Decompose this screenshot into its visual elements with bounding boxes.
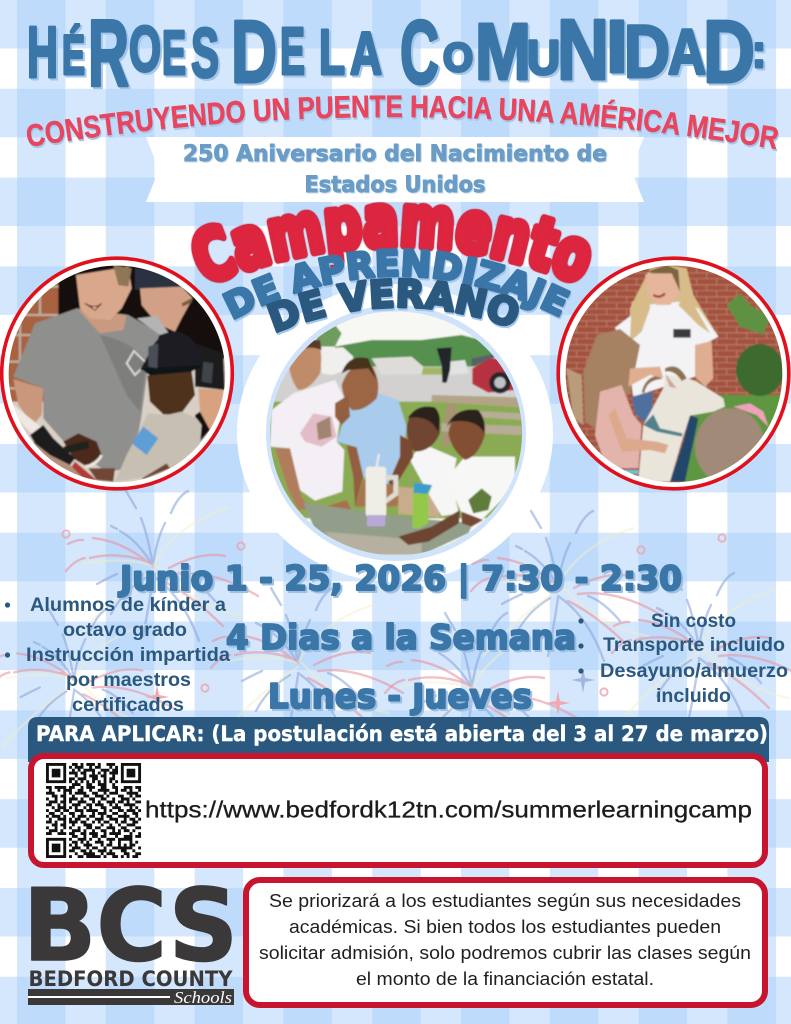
right bullet list: Sin costo <box>651 611 736 632</box>
right bullet list: Desayuno/almuerzo <box>600 661 788 682</box>
right photo: goat visit <box>550 255 791 495</box>
priority note box: el monto de la financiación estatal. <box>356 969 654 989</box>
apply header bar <box>28 717 769 762</box>
title: E <box>162 19 186 88</box>
left bullet list: por maestros <box>66 670 191 691</box>
url box <box>31 756 765 865</box>
title: O <box>129 13 161 85</box>
ribbon banner <box>146 137 644 202</box>
title: C <box>400 3 439 103</box>
poster: CONSTRUYENDO UN PUENTE HACIA UNA AMÉRICA MEJOR <box>26 95 779 152</box>
apply header bar: PARA APLICAR: (La postulación está abierta del 3 al 27 de marzo) <box>36 722 768 746</box>
url text: https://www.bedfordk12tn.com/summerlearningcamp <box>145 796 752 822</box>
right bullet list: incluido <box>656 686 731 707</box>
campamento heading: DE VERANO <box>266 278 520 335</box>
title: M <box>475 7 531 96</box>
subtitle arc <box>28 117 776 149</box>
left photo: firefighters <box>0 255 240 495</box>
title: H <box>27 13 58 93</box>
left bullet list: octavo grado <box>63 620 187 641</box>
title: I <box>606 5 628 88</box>
bcs logo: BCS <box>23 867 238 984</box>
left bullet list: Alumnos de kínder a <box>30 595 226 616</box>
center photo: children <box>270 311 522 556</box>
campamento heading: Campamento <box>190 202 592 284</box>
priority note box: Se priorizará a los estudiantes según sus necesidades <box>269 891 741 911</box>
left bullet list: certificados <box>72 695 184 716</box>
ribbon text line one: 250 Aniversario del Nacimiento de <box>183 142 607 167</box>
title: A <box>668 16 706 88</box>
central photo: white halo <box>237 284 553 582</box>
left bullet list: Instrucción impartida <box>26 645 230 666</box>
title: A <box>350 20 382 87</box>
campamento heading: DE APRENDIZAJE <box>222 248 572 322</box>
days per week: 4 Dias a la Semana <box>226 618 576 658</box>
right bullet list <box>578 611 788 707</box>
de aprendizaje <box>232 276 600 340</box>
bcs logo: BEDFORD COUNTY <box>28 967 233 991</box>
qr code <box>46 763 141 858</box>
priority note box: académicas. Si bien todos los estudiantes pueden <box>289 917 721 937</box>
title: O <box>443 36 473 80</box>
priority note box <box>246 880 765 1005</box>
title: U <box>527 32 560 85</box>
days range: Lunes - Jueves <box>268 677 532 717</box>
ribbon text line two: Estados Unidos <box>304 173 486 198</box>
de verano <box>274 307 550 345</box>
right bullet list: Transporte incluido <box>603 635 785 656</box>
title: É <box>62 23 85 86</box>
title: L <box>319 16 345 88</box>
campamento heading <box>190 202 592 335</box>
left bullet list <box>5 595 230 716</box>
date and time: Junio 1 - 25, 2026 | 7:30 - 2:30 <box>118 559 682 599</box>
title: D <box>703 2 755 101</box>
title: S <box>191 14 219 92</box>
title: D <box>231 2 277 101</box>
title: D <box>624 10 670 93</box>
title: E <box>280 14 305 89</box>
fireworks <box>0 491 791 763</box>
title: : <box>752 25 766 77</box>
priority note box: solicitar admisión, solo podremos cubrir las clases según <box>259 943 751 963</box>
title: R <box>88 1 129 107</box>
title: N <box>557 3 609 98</box>
bcs logo: Schools <box>174 988 232 1007</box>
